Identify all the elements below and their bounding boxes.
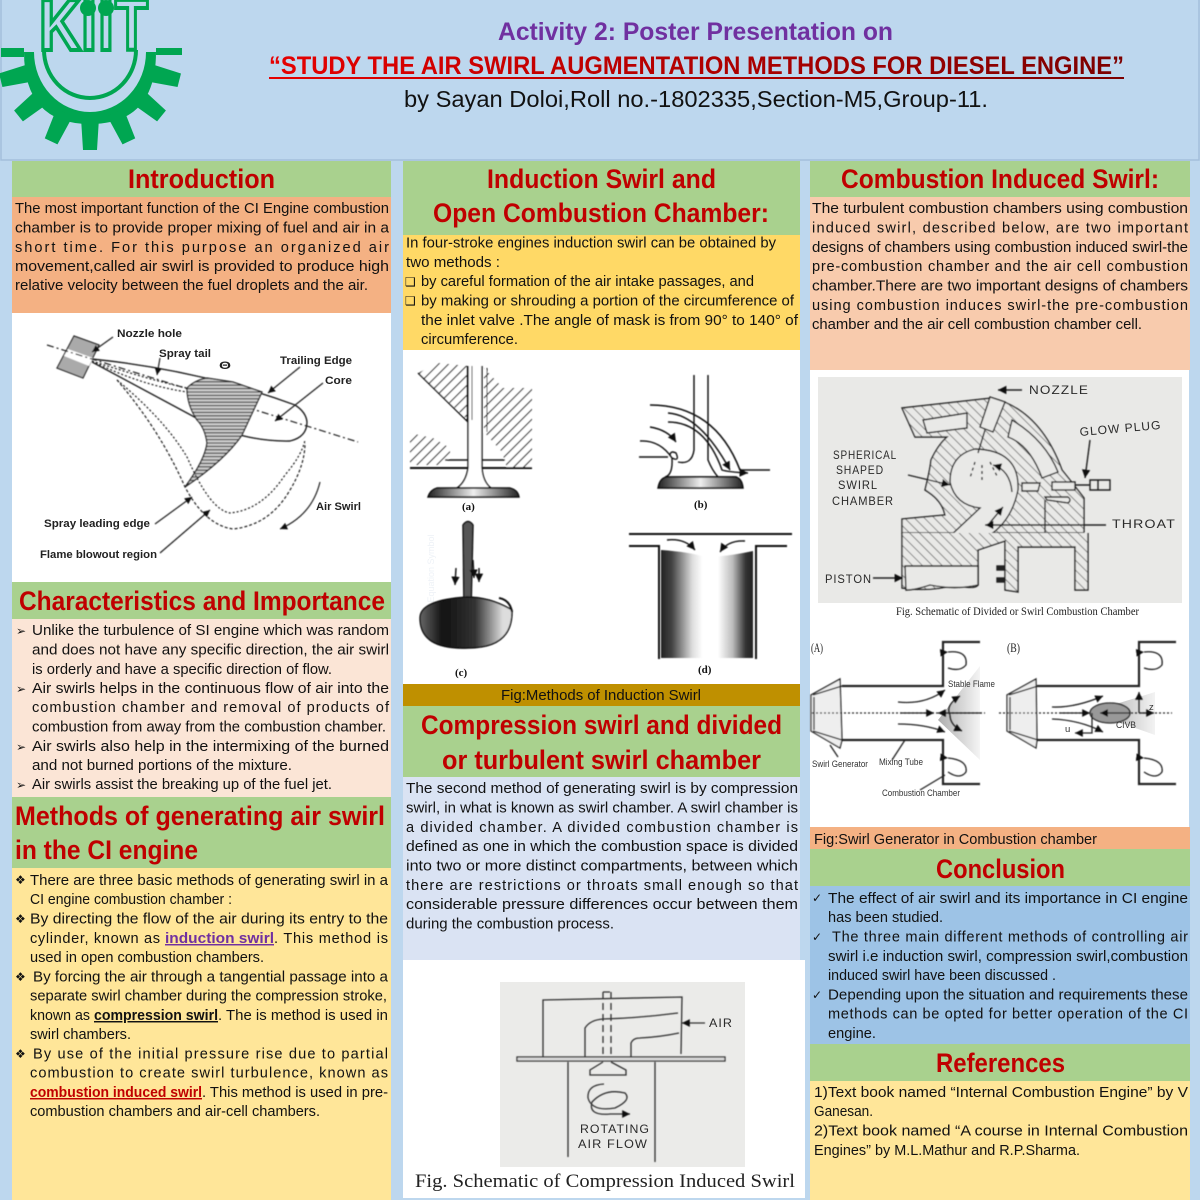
text block: induction methods: ❑ (405, 294, 416, 308)
text block: combustion induced swirl: pre-combustion chamber and the air cell combustion (812, 259, 1188, 275)
text block: combustion induced swirl: using combustion induces swirl-the pre-combustion (812, 298, 1188, 314)
handwritten labels: THROAT (1112, 517, 1176, 531)
bullet list: characteristics (16, 623, 390, 793)
figure: methods of induction swirl: Date Equation Symbol (426, 534, 436, 624)
bullet list: methods: ❖ (15, 912, 26, 926)
labels: (A) (811, 640, 823, 655)
bullet list: conclusion: ✓ (812, 988, 822, 1002)
heading: characteristics: Characteristics and Importance (19, 586, 385, 616)
title: “STUDY THE AIR SWIRL AUGMENTATION METHODS FOR DIESEL ENGINE” (269, 52, 1124, 80)
labels: Mixing Tube (879, 757, 923, 768)
heading: references: References (936, 1048, 1065, 1078)
panel: references (810, 1044, 1190, 1200)
bullet list: methods: By directing the flow of the air during its entry to the (30, 912, 388, 928)
bullet list: characteristics: and does not have any specific direction, the air swirl (32, 642, 389, 658)
text block: combustion induced swirl (812, 201, 1188, 333)
bullet list: characteristics: combustion from away from the combustion chamber. (32, 720, 386, 736)
labels: Nozzle hole (117, 328, 182, 340)
panel: induction swirl and open combustion chamber (403, 161, 800, 350)
text block: compression swirl: defined as one in which the combustion space is divided (406, 839, 798, 855)
bullet list: conclusion: has been studied. (828, 910, 943, 926)
cylinder d (629, 534, 792, 659)
labels: Stable Flame (948, 679, 995, 690)
bullet list: methods: By use of the initial pressure rise due to partial (33, 1046, 388, 1062)
diagram A (811, 642, 985, 790)
text block: introduction: chamber is to provide proper mixing of fuel and air in a (15, 220, 390, 236)
text block: introduction: movement,called air swirl is provided to produce high (15, 259, 389, 275)
bullet list: methods: By forcing the air through a tangential passage into a (33, 970, 389, 986)
text block: induction methods: by careful formation of the air intake passages, and (421, 274, 754, 290)
bullet list: conclusion: Depending upon the situation and requirements these (828, 988, 1188, 1004)
text block: combustion induced swirl: induced swirl, described below, are two important (812, 220, 1188, 236)
logo: KIIT gear emblem (0, 0, 182, 150)
bullet list: conclusion (812, 891, 1188, 1042)
labels: Spray leading edge (44, 518, 150, 530)
bullet list: characteristics: ➢ (16, 740, 26, 754)
bullet list: characteristics: and not burned portions of the mixture. (32, 758, 292, 774)
handwritten labels: NOZZLE (1029, 383, 1089, 397)
bullet list: conclusion: engine. (828, 1026, 876, 1042)
text block: induction methods: the inlet valve .The angle of mask is from 90° to 140° of (421, 313, 799, 329)
panel: combustion induced swirl (810, 161, 1190, 370)
caption: swirl generator: Fig:Swirl Generator in Combustion chamber (814, 832, 1097, 848)
text block: combustion induced swirl: designs of chambers using combustion induced swirl-the (812, 240, 1188, 256)
panel: compression swirl (403, 706, 800, 960)
heading: compression swirl: Compression swirl and divided (421, 710, 782, 740)
bullet list: characteristics: Air swirls assist the breaking up of the fuel jet. (32, 777, 332, 793)
labels: Spray tail (159, 348, 211, 360)
valve c (420, 522, 512, 648)
labels: Combustion Chamber (882, 788, 960, 799)
text block: induction methods: In four-stroke engines induction swirl can be obtained by (406, 236, 777, 252)
bullet list: conclusion: The effect of air swirl and its importance in CI engine (828, 891, 1188, 907)
handwritten labels: SPHERICAL (833, 448, 897, 462)
bullet list: methods: combustion to create swirl turbulence, known as (30, 1066, 388, 1082)
text block: combustion induced swirl: chamber and the air cell combustion chamber cell. (812, 317, 1142, 333)
bullet list: methods: compression swirl (94, 1008, 218, 1024)
bullet list: methods: combustion induced swirl (30, 1085, 202, 1101)
heading: methods (15, 801, 385, 865)
figure: compression induced swirl (403, 960, 805, 1198)
caption: methods of induction swirl: Fig:Methods of Induction Swirl (501, 688, 701, 704)
labels: CIVB (1116, 720, 1136, 731)
bullet list: methods: known as (30, 1008, 90, 1024)
valve a (410, 363, 532, 497)
text block: induction methods: circumference. (421, 332, 518, 348)
bullet list: methods: ❖ (15, 970, 26, 984)
labels: Flame blowout region (40, 549, 157, 561)
bullet list: conclusion: The three main different methods of controlling air (832, 930, 1188, 946)
handwritten labels: CHAMBER (832, 494, 894, 508)
panel: characteristics and importance (12, 582, 391, 797)
figure: methods of induction swirl (403, 350, 800, 684)
bullet list: methods: swirl chambers. (30, 1027, 131, 1043)
bullet list: methods: used in open combustion chambers. (30, 950, 264, 966)
bullet list: characteristics: combustion chamber and removal of products of (32, 700, 390, 716)
handwritten labels (578, 1016, 733, 1151)
bullet list: methods: ❖ (15, 1047, 26, 1061)
handwritten labels (825, 383, 1176, 586)
figure: spray and air swirl diagram (12, 313, 391, 582)
bullet list: methods: cylinder, known as (30, 931, 160, 947)
text block: compression swirl: into two or more distinct compartments, between which (406, 858, 798, 874)
text block: compression swirl: swirl, in what is known as swirl chamber. A swirl chamber is (406, 800, 798, 816)
handwritten labels: GLOW PLUG (1079, 418, 1162, 439)
text block: compression swirl: there are restrictions or throats small enough so that (406, 878, 798, 894)
handwritten labels: PISTON (825, 572, 872, 586)
panel: conclusion (810, 849, 1190, 1044)
text block: introduction: short time. For this purpose an organized air (15, 240, 389, 256)
bullet list: conclusion: ✓ (812, 891, 822, 905)
bullet list: methods: There are three basic methods of generating swirl in a (30, 873, 389, 889)
valve b (639, 375, 770, 488)
handwritten labels: AIR (709, 1016, 733, 1030)
labels: Swirl Generator (812, 759, 868, 770)
heading: induction swirl (433, 164, 769, 228)
heading: methods: in the CI engine (15, 835, 198, 865)
bullet list: characteristics: Unlike the turbulence of SI engine which was random (32, 623, 389, 639)
figure: swirl generator in combustion chamber (810, 630, 1189, 827)
figure: divided swirl combustion chamber (810, 370, 1189, 630)
text block: compression swirl: considerable pressure differences occur between them (406, 897, 798, 913)
figure labels a-d: (c) (455, 667, 468, 679)
heading: induction swirl: Induction Swirl and (487, 164, 716, 194)
labels: (B) (1007, 640, 1020, 655)
bullet list: characteristics: ➢ (16, 624, 26, 638)
caption: methods of induction swirl (403, 684, 800, 706)
bullet list: methods: . This method is used in pre- (202, 1085, 388, 1101)
text block: references (814, 1085, 1188, 1159)
bullet list: characteristics: ➢ (16, 682, 26, 696)
heading: Introduction: Introduction (128, 164, 275, 194)
bullet list: methods: . This method is (274, 931, 388, 947)
figure labels a-d (455, 499, 712, 679)
text block: combustion induced swirl: chamber.There are two important designs of chambers (812, 278, 1188, 294)
bullet list: methods: induction swirl (165, 931, 274, 947)
bullet list: conclusion: induced swirl have been discussed . (828, 968, 1056, 984)
handwritten labels: AIR FLOW (578, 1137, 648, 1151)
bullet list: characteristics: Air swirls also help in the intermixing of the burned (32, 739, 389, 755)
text block: introduction (15, 201, 390, 294)
bullet list: characteristics: Air swirls helps in the continuous flow of air into the (32, 681, 389, 697)
handwritten labels: ROTATING (580, 1122, 650, 1136)
bullet list: methods: CI engine combustion chamber : (30, 892, 232, 908)
text block: references: 2)Text book named “A course in Internal Combustion (814, 1124, 1188, 1140)
panel: introduction (12, 161, 391, 313)
caption: swirl combustion chamber: Fig. Schematic of Divided or Swirl Combustion Chamber (896, 606, 1139, 618)
heading: compression swirl: or turbulent swirl chamber (442, 745, 761, 775)
labels (811, 640, 1154, 799)
text block: introduction: The most important function of the CI Engine combustion (15, 201, 389, 217)
figure labels a-d: (a) (462, 501, 475, 513)
text block: compression swirl: during the combustion process. (406, 916, 614, 932)
caption: compression induced swirl: Fig. Schematic of Compression Induced Swirl (415, 1171, 795, 1192)
labels (40, 328, 361, 561)
text block: induction methods: two methods : (406, 255, 500, 271)
text block: references: 1)Text book named “Internal Combustion Engine” by V (814, 1085, 1188, 1101)
bullet list: methods: separate swirl chamber during the compression stroke, (30, 988, 387, 1004)
handwritten labels: SHAPED (836, 463, 884, 477)
bullet list: methods: combustion chambers and air-cell chambers. (30, 1104, 320, 1120)
labels: Air Swirl (316, 501, 361, 513)
diagram B (999, 642, 1176, 784)
heading: conclusion: Conclusion (936, 854, 1065, 884)
labels: u (1065, 724, 1070, 735)
labels: Core (325, 375, 352, 387)
bullet list: methods (15, 873, 389, 1120)
bullet list: methods: ❖ (15, 873, 26, 887)
heading: combustion induced swirl: Combustion Induced Swirl: (841, 164, 1159, 194)
figure labels a-d: (d) (698, 664, 712, 676)
bullet list: conclusion: methods can be opted for better operation of the CI (828, 1006, 1188, 1022)
text block: compression swirl: The second method of generating swirl is by compression (406, 781, 798, 797)
text block: compression swirl (406, 781, 798, 932)
title (269, 18, 1124, 112)
text block: combustion induced swirl: The turbulent combustion chambers using combustion (812, 201, 1188, 217)
text block: references: Ganesan. (814, 1104, 873, 1120)
text block: compression swirl: a divided chamber. A divided combustion chamber is (406, 820, 798, 836)
bullet list: conclusion: ✓ (812, 930, 822, 944)
title: by Sayan Doloi,Roll no.-1802335,Section-M5,Group-11. (404, 86, 988, 112)
bullet list: conclusion: swirl i.e induction swirl, compression swirl,combustion (828, 949, 1188, 965)
header banner (0, 0, 1199, 160)
heading: induction swirl: Open Combustion Chamber: (433, 198, 769, 228)
text block: induction methods: ❑ (405, 275, 416, 289)
figure labels a-d: (b) (694, 499, 708, 511)
heading: methods: Methods of generating air swirl (15, 801, 385, 831)
labels: Θ (219, 360, 232, 372)
labels: z (1149, 702, 1154, 713)
heading: compression swirl (421, 710, 782, 775)
labels: Trailing Edge (280, 355, 352, 367)
handwritten labels: SWIRL (838, 478, 878, 492)
panel: methods of generating air swirl (12, 797, 391, 1200)
text block: references: Engines” by M.L.Mathur and R.P.Sharma. (814, 1143, 1080, 1159)
text block: induction methods: by making or shrouding a portion of the circumference of (421, 294, 795, 310)
title: Activity 2: Poster Presentation on (498, 18, 893, 46)
text block: induction methods (405, 236, 799, 348)
text block: introduction: relative velocity between the fuel droplets and the air. (15, 278, 368, 294)
bullet list: characteristics: ➢ (16, 778, 26, 792)
bullet list: methods: . The is method is used in (218, 1008, 388, 1024)
caption: swirl generator (810, 827, 1190, 849)
bullet list: characteristics: is orderly and have a specific direction of flow. (32, 662, 332, 678)
